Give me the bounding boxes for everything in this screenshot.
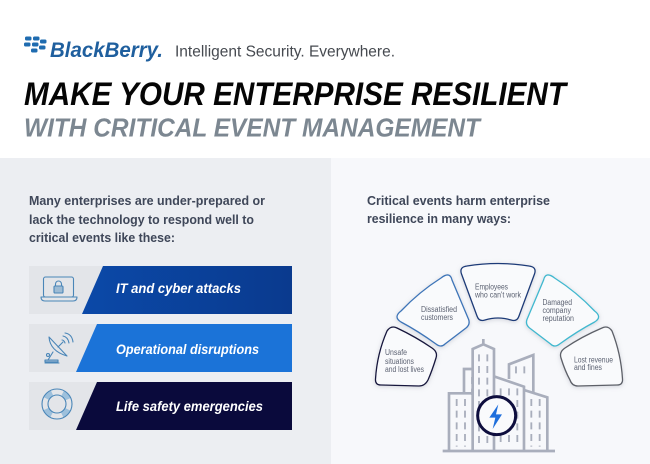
tile: employees who can't work: Employees	[475, 282, 508, 292]
intro text: Many enterprises are under-prepared or	[29, 193, 265, 208]
intro text: critical events like these:	[29, 230, 175, 245]
panel: left	[0, 158, 331, 464]
icon: city with lightning bolt	[443, 339, 555, 451]
subtitle: WITH CRITICAL EVENT MANAGEMENT	[24, 114, 482, 142]
panel: right	[331, 158, 650, 464]
intro text: Critical events harm enterprise	[367, 193, 550, 208]
tile: lost revenue	[560, 327, 623, 386]
tile: unsafe situations: and lost lives	[385, 365, 424, 374]
row: Life safety emergencies	[29, 382, 292, 430]
tile: damaged company reputation	[526, 275, 599, 346]
tile: lost revenue: and fines	[574, 363, 602, 372]
intro text: resilience in many ways:	[367, 211, 511, 226]
icon: BlackBerry dots	[24, 36, 46, 52]
tile: dissatisfied customers: customers	[421, 313, 453, 322]
tagline: Intelligent Security. Everywhere.	[175, 44, 395, 60]
tile: employees who can't work	[461, 264, 535, 320]
tile: dissatisfied customers	[397, 275, 469, 346]
row: Life safety emergencies: Life safety emergencies	[116, 399, 263, 414]
tile: unsafe situations: situations	[385, 357, 414, 366]
intro text	[29, 193, 265, 245]
title: MAKE YOUR ENTERPRISE RESILIENT	[24, 76, 569, 112]
lightning bolt	[489, 404, 502, 429]
circle badge	[478, 397, 516, 435]
intro text: lack the technology to respond well to	[29, 212, 254, 227]
tile: unsafe situations	[375, 327, 436, 386]
tile: damaged company reputation: reputation	[542, 314, 574, 323]
row: Operational disruptions: Operational disruptions	[116, 342, 259, 357]
icon: laptop with lock	[41, 277, 77, 301]
tile: damaged company reputation: Damaged	[542, 298, 572, 307]
row: IT and cyber attacks: IT and cyber attacks	[116, 281, 241, 296]
logo: BlackBerry	[24, 36, 163, 62]
tile: dissatisfied customers: Dissatisfied	[421, 305, 457, 314]
row: IT and cyber attacks	[29, 266, 292, 314]
tile: unsafe situations: Unsafe	[385, 348, 407, 357]
tile: damaged company reputation: company	[542, 306, 571, 315]
row: Operational disruptions	[29, 324, 292, 372]
intro text	[367, 193, 550, 226]
icon: life ring	[42, 389, 72, 419]
icon: satellite dish	[45, 333, 73, 363]
wordmark: BlackBerry.	[50, 39, 163, 62]
tile: lost revenue: Lost revenue	[574, 356, 613, 364]
tile: employees who can't work: who can't work	[474, 290, 521, 300]
